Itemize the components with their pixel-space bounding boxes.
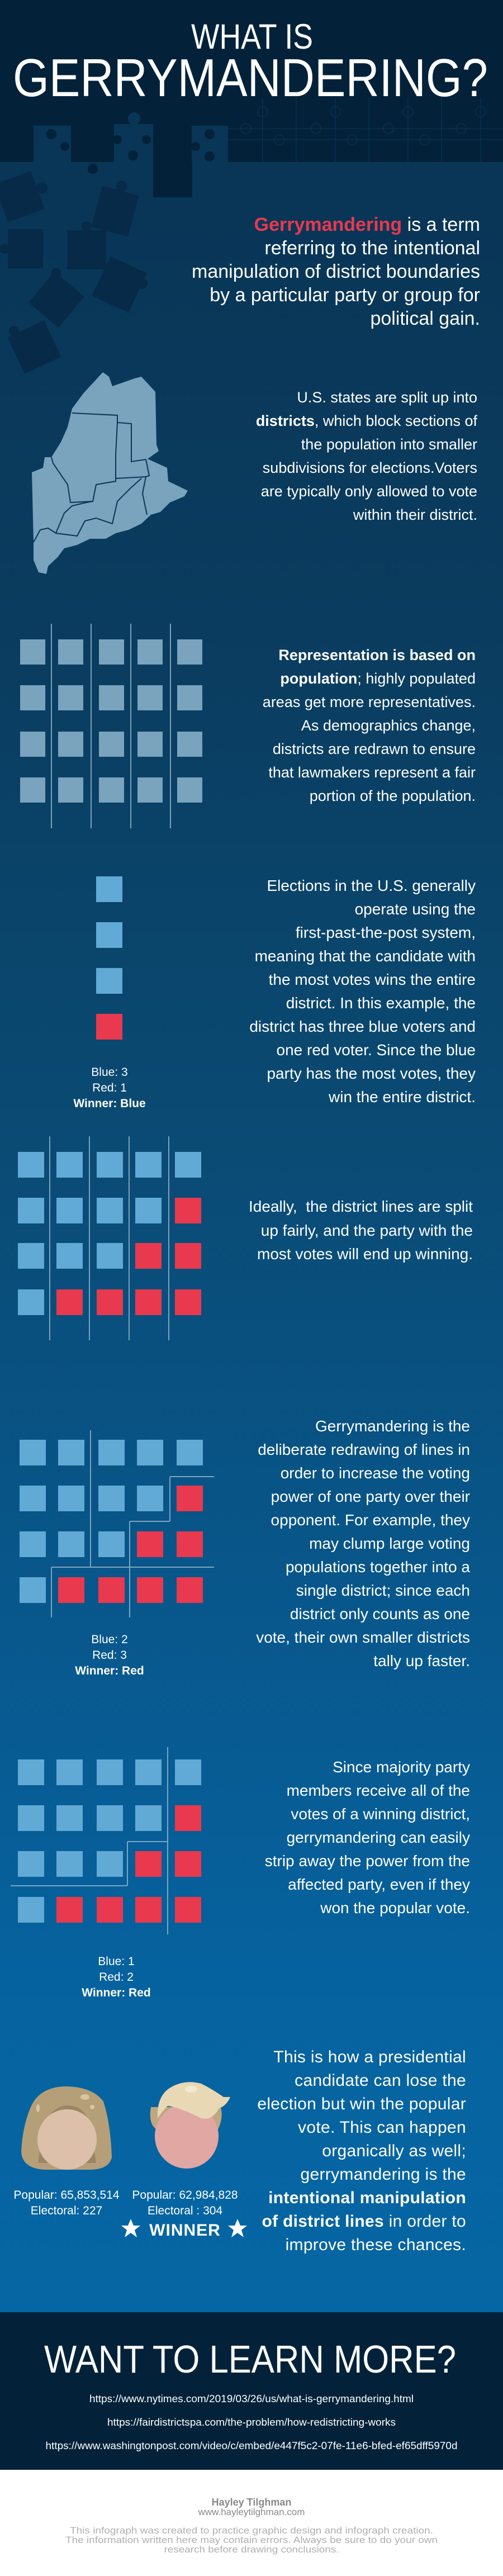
single district voters column [96, 876, 122, 1040]
text: presidential: improve these chances. [286, 2236, 466, 2254]
title [13, 17, 488, 108]
text: representation: districts are redrawn to ensure [273, 741, 476, 757]
text: first past the post: party has the most votes, they [267, 1065, 476, 1082]
text: gerrymandering definition: vote, their own smaller districts [256, 1629, 470, 1646]
label: blue 2 red 3: Red: 3 [92, 1649, 127, 1662]
text: first past the post: win the entire district. [329, 1088, 476, 1106]
gerrymandered grid 2 [11, 1747, 201, 1934]
text: gerrymandering definition [256, 1417, 470, 1669]
text: gerrymandering definition: tally up faster. [373, 1652, 470, 1669]
fair districts grid [18, 1136, 201, 1340]
label: female candidate stats [13, 2189, 120, 2217]
text: presidential: of district lines in order to [262, 2212, 466, 2231]
intro text: manipulation of district boundaries [192, 261, 480, 282]
text: majority party: Since majority party [333, 1758, 470, 1776]
text: districts: within their district. [353, 506, 477, 523]
text: gerrymandering definition: opponent. For example, they [271, 1511, 470, 1529]
label: blue 3 red 1: Red: 1 [92, 1081, 127, 1094]
footer credits: www.hayleytilghman.com [198, 2507, 305, 2517]
text: first past the post: Elections in the U.S. generally [267, 877, 476, 894]
text: first past the post: operate using the [355, 900, 476, 918]
text: representation: As demographics change, [301, 717, 476, 734]
text: majority party: won the popular vote. [320, 1899, 470, 1916]
text: majority party: strip away the power from the [265, 1852, 470, 1870]
footer: learn more: https://www.nytimes.com/2019/03/26/us/what-is-gerrymandering.html [89, 2393, 414, 2404]
footer credits: The information written here may contain errors. Always be sure to do your own [65, 2535, 438, 2545]
text: gerrymandering definition: may clump large voting [309, 1535, 470, 1552]
footer: learn more: WANT TO LEARN MORE? [44, 2337, 456, 2381]
text: first past the post: district has three blue voters and [249, 1018, 476, 1035]
text: first past the post: one red voter. Since the blue [277, 1041, 476, 1059]
title: WHAT IS [191, 17, 313, 56]
icon: male candidate [150, 2082, 230, 2169]
text: gerrymandering definition: district only counts as one [290, 1605, 470, 1623]
footer credits: research before drawing conclusions. [164, 2544, 339, 2555]
text: majority party: votes of a winning district, [291, 1805, 470, 1823]
text: majority party [265, 1758, 470, 1916]
label: male candidate stats: Electoral : 304 [148, 2204, 222, 2217]
icon: female candidate [21, 2086, 112, 2170]
gerrymandered grid 1 [20, 1430, 214, 1617]
text: districts: U.S. states are split up into [297, 389, 477, 406]
text: first past the post: meaning that the candidate with [255, 947, 476, 965]
text: districts: districts, which block sections of [256, 412, 477, 429]
footer credits [65, 2497, 438, 2555]
text: presidential: This is how a presidential [273, 2048, 466, 2066]
text: majority party: affected party, even if they [288, 1876, 470, 1893]
label: male candidate stats [132, 2189, 238, 2217]
label: blue 3 red 1 [73, 1066, 146, 1110]
text: districts [256, 389, 477, 523]
text: ideally: Ideally, the district lines are split [249, 1198, 473, 1215]
intro text: political gain. [370, 308, 480, 329]
text: districts: subdivisions for elections.Voters [263, 459, 477, 476]
text: gerrymandering definition: Gerrymandering is the [315, 1417, 470, 1435]
text: first past the post: the most votes wins the entire [269, 971, 476, 988]
label: blue 1 red 2: Winner: Red [82, 1986, 151, 1999]
population grid [20, 624, 202, 828]
text: presidential [257, 2048, 466, 2254]
text: representation: portion of the population. [310, 787, 476, 804]
footer: learn more [44, 2337, 457, 2451]
text: first past the post [249, 877, 476, 1106]
icon: stars [121, 2219, 247, 2237]
text: first past the post: district. In this example, the [286, 994, 476, 1012]
text: presidential: candidate can lose the [295, 2071, 466, 2090]
text: presidential: organically as well; [322, 2142, 466, 2160]
text: majority party: members receive all of the [287, 1782, 470, 1799]
label: female candidate stats: Electoral: 227 [31, 2204, 102, 2217]
label: blue 2 red 3: Blue: 2 [91, 1633, 128, 1646]
text: ideally: most votes will end up winning. [257, 1245, 473, 1263]
text: districts: the population into smaller [301, 436, 477, 453]
text: ideally [249, 1198, 473, 1263]
label: blue 1 red 2 [82, 1955, 151, 1999]
text: first past the post: first-past-the-post system, [296, 924, 476, 941]
label: blue 2 red 3: Winner: Red [75, 1664, 144, 1677]
label: blue 2 red 3 [75, 1633, 144, 1677]
intro text: referring to the intentional [264, 238, 480, 259]
text: majority party: gerrymandering can easily [287, 1829, 470, 1846]
text: representation [263, 647, 476, 804]
text: gerrymandering definition: single district; since each [296, 1582, 470, 1599]
decorative puzzle pieces header [0, 98, 503, 374]
footer credits: Hayley Tilghman [212, 2497, 291, 2508]
text: representation: areas get more representatives. [263, 694, 476, 710]
label: blue 1 red 2: Red: 2 [99, 1971, 134, 1984]
footer: learn more: https://fairdistrictspa.com/the-problem/how-redistricting-works [107, 2417, 396, 2428]
footer credits: This infograph was created to practice graphic design and infograph creation. [70, 2525, 433, 2536]
label: winner: WINNER [149, 2221, 221, 2240]
text: gerrymandering definition: populations together into a [286, 1558, 470, 1576]
text: ideally: up fairly, and the party with the [261, 1222, 473, 1239]
text: presidential: intentional manipulation [268, 2189, 466, 2207]
text: presidential: gerrymandering is the [301, 2165, 466, 2184]
label: blue 1 red 2: Blue: 1 [98, 1955, 135, 1968]
text: presidential: election but win the popular [257, 2095, 466, 2113]
intro text: by a particular party or group for [210, 284, 480, 306]
text: representation: population; highly populated [280, 670, 476, 687]
label: blue 3 red 1: Blue: 3 [91, 1066, 128, 1079]
label: female candidate stats: Popular: 65,853,514 [13, 2189, 120, 2202]
text: representation: that lawmakers represent a fair [268, 764, 476, 781]
text: districts: are typically only allowed to vote [261, 483, 477, 500]
label: male candidate stats: Popular: 62,984,828 [132, 2189, 238, 2202]
text: gerrymandering definition: power of one party over their [271, 1488, 470, 1505]
text: representation: Representation is based on [278, 647, 476, 663]
text: gerrymandering definition: order to increase the voting [281, 1464, 470, 1482]
footer: learn more: https://www.washingtonpost.com/video/c/embed/e447f5c2-07fe-11e6-bfed-ef65dff5970d [46, 2440, 457, 2451]
map of Maine with districts [32, 372, 188, 574]
intro text: Gerrymandering is a term [254, 214, 480, 235]
intro text [192, 214, 480, 329]
label: blue 3 red 1: Winner: Blue [73, 1097, 146, 1110]
text: gerrymandering definition: deliberate redrawing of lines in [258, 1441, 470, 1458]
text: presidential: vote. This can happen [298, 2118, 466, 2137]
